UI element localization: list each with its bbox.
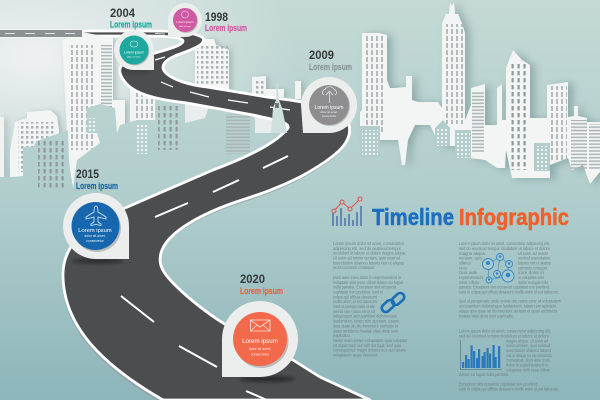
text block: left column: Lorem ipsum dolor sit amet, consectetur: [333, 241, 405, 246]
text block: right column top: Ut enim ad minim: [518, 251, 548, 256]
bar chart: [460, 340, 502, 370]
text block: right column top: veniam, quis: [459, 256, 482, 261]
text block: right column bottom: sed do eiusmod tempor incididunt ut labore et dolore: [459, 334, 550, 338]
text block: right column top: commodo consequat.: [518, 265, 548, 270]
label: 2020: [240, 272, 283, 297]
label: 1998: [205, 10, 247, 34]
text block: left column: incididunt ut labore et dolore magna aliqua.: [333, 251, 406, 256]
pin: 2020: Lorem ipsum: [242, 338, 278, 345]
text block: left column: explicabo.: [333, 333, 351, 338]
text block: right column top: in voluptate velit: [518, 275, 545, 280]
text block: left column: Sed ut perspiciatis unde: [333, 304, 376, 309]
label: 2009: Lorem ipsum: [309, 62, 352, 73]
text block: left column: voluptatem accusantium doloremque: [333, 314, 398, 319]
text block: left column: voluptate velit esse cillum dolore eu fugiat: [333, 280, 404, 285]
text block: left column: Ut enim ad minim veniam, quis nostrud: [333, 256, 401, 260]
label: 1998: 1998: [205, 10, 228, 24]
text block: left column: Nemo enim ipsam voluptatem quia voluptas: [333, 338, 407, 343]
label: 2015: 2015: [76, 167, 99, 181]
label: 2020: Lorem ipsum: [240, 286, 283, 297]
text block: right column bottom: dolore eu fugiat nulla pariatur.: [459, 372, 509, 377]
pin: 2009: [301, 77, 357, 133]
text block: right column bottom: Lorem ipsum dolor sit amet, consectetur adipiscing elit,: [459, 328, 551, 334]
text block: left column: exercitation ullamco laboris nisi ut aliquip: [333, 260, 405, 265]
pin: 1998: Lorem ipsum: [176, 20, 194, 24]
text block: left column: sit aspernatur aut odit aut fugit, sed quia: [333, 343, 402, 348]
pin: 2015: consectetur: [86, 239, 105, 243]
text block: left column: ipsa quae ab illo inventore veritatis et: [333, 323, 399, 328]
text block: right column top: esse cillum: [459, 280, 479, 285]
teal buildings in right skyline: [360, 120, 550, 171]
text block: right column top: beatae vitae dicta sunt explicabo.: [459, 314, 514, 318]
pin: 1998: [168, 3, 202, 37]
light sky glow: [0, 0, 330, 190]
icon: chain link: [380, 291, 406, 314]
text block: right column bottom: minim veniam, quis nostrud: [506, 343, 551, 348]
icon: people network: [482, 254, 514, 283]
pin: 2015: dolor sit amet,: [84, 234, 106, 238]
text block: right column top: Duis aute: [459, 270, 478, 275]
spire building over road: [271, 79, 287, 133]
right city skyline: [360, 2, 600, 184]
label: 2015: [76, 167, 118, 192]
text block: right column bottom: sunt in culpa qui officia deserunt mollit anim id est laborum.: [459, 386, 559, 392]
pin: 1998: dolor sit amet: [179, 25, 191, 28]
text block: right column top: ex ea: [459, 265, 467, 270]
icon: line and bar chart: [332, 197, 362, 226]
text block: right column top: reprehenderit: [459, 275, 484, 280]
text block: right column bottom: [459, 328, 559, 392]
text block: left column: laudantium, totam rem aperiam, eaque: [333, 319, 400, 324]
pin: 2009: dolor sit amet,: [320, 110, 338, 114]
text block: left column: adipiscing elit, sed do eiusmod tempor: [333, 246, 402, 251]
text block: right column top: dolore eu fugiat nulla: [518, 280, 548, 285]
text block: right column top: nostrud exercitation: [518, 256, 551, 261]
text block: right column bottom: Excepteur sint occaecat cupidatat non proident,: [459, 382, 538, 386]
text block: right column top: sed do eiusmod tempor incididunt ut labore et dolore: [459, 246, 551, 251]
text block: right column bottom: voluptate velit esse cillum: [506, 368, 550, 372]
text block: right column top: irure dolor in: [518, 270, 545, 275]
pin: 2015: Lorem ipsum: [78, 228, 112, 234]
text block: right column top: Sed ut perspiciatis unde omnis iste natus error sit voluptatem: [459, 298, 561, 304]
text block: left column: mollit anim id est laborum.: [333, 299, 378, 304]
text block: right column top: Lorem ipsum dolor sit amet, consectetur adipiscing elit,: [459, 241, 550, 246]
pin: 2009: Lorem ipsum: [315, 105, 343, 111]
label: 2009: [309, 48, 352, 73]
text block: right column top: ullamco: [459, 260, 471, 266]
pin: 2004: dolor sit amet,: [127, 56, 141, 58]
text block: right column bottom: nisi ut aliquip ex ea commodo: [506, 353, 552, 358]
pin: 2009: consectetur: [322, 114, 336, 118]
text block: left column: culpa qui officia deserunt: [333, 294, 378, 299]
text block: left column: voluptatem sequi nesciunt.: [333, 352, 378, 358]
label: 1998: Lorem ipsum: [205, 23, 247, 34]
text block: right column top: pariatur. Excepteur sint occaecat cupidatat non proident,: [459, 284, 550, 290]
pin: 2015: [63, 193, 129, 264]
text block: left column: cupidatat non proident, sunt in: [333, 290, 384, 294]
text block: left column: ex ea commodo consequat.: [333, 265, 375, 270]
title: Timeline: [372, 204, 454, 230]
label: 2020: 2020: [240, 272, 265, 286]
road: [0, 30, 370, 400]
pin: 2020: consectetur: [251, 352, 270, 356]
text block: left column: [333, 241, 407, 358]
text block: right column top: accusantium doloremque laudantium, totam rem aperiam,: [459, 304, 557, 308]
pin: 2020: dolor sit amet,: [249, 347, 271, 351]
text block: right column top: laboris nisi ut aliquip: [518, 260, 552, 266]
text block: right column bottom: magna aliqua. Ut enim ad: [506, 338, 549, 344]
text block: right column bottom: consequat. Duis aute irure: [506, 358, 551, 362]
text block: right column top: eaque ipsa quae ab illo inventore veritatis et quasi architecto: [459, 308, 558, 314]
text block: left column: omnis iste natus error sit: [333, 309, 376, 314]
teal foreground buildings: [0, 97, 310, 270]
text block: left column: nulla pariatur. Excepteur sint occaecat: [333, 285, 397, 290]
title: Infographic: [459, 204, 569, 230]
left city skyline: [0, 32, 301, 190]
text block: right column bottom: exercitation ullamco laboris: [506, 348, 551, 353]
label: 2015: Lorem ipsum: [76, 181, 118, 192]
pin: 2020: [222, 301, 298, 382]
text block: left column: consequuntur magni dolores eos qui ratione: [333, 348, 407, 353]
text block: right column top: magna aliqua.: [459, 251, 486, 256]
text block: right column top: sunt in culpa qui officia deserunt mollit anim id est laborum.: [459, 289, 559, 294]
pin: 2004: [114, 30, 154, 73]
label: 2004: Lorem ipsum: [110, 20, 152, 30]
label: 2004: [110, 6, 152, 30]
label: 2004: 2004: [110, 6, 135, 20]
pin: 2004: Lorem ipsum: [124, 50, 144, 54]
title: [372, 204, 569, 230]
text block: right column bottom: dolor in reprehenderit in: [506, 362, 549, 368]
text block: left column: Duis aute irure dolor in reprehenderit in: [333, 275, 402, 280]
label: 2009: 2009: [309, 48, 334, 62]
text block: right column top: [459, 241, 561, 318]
text block: left column: quasi architecto beatae vitae dicta sunt: [333, 328, 399, 333]
